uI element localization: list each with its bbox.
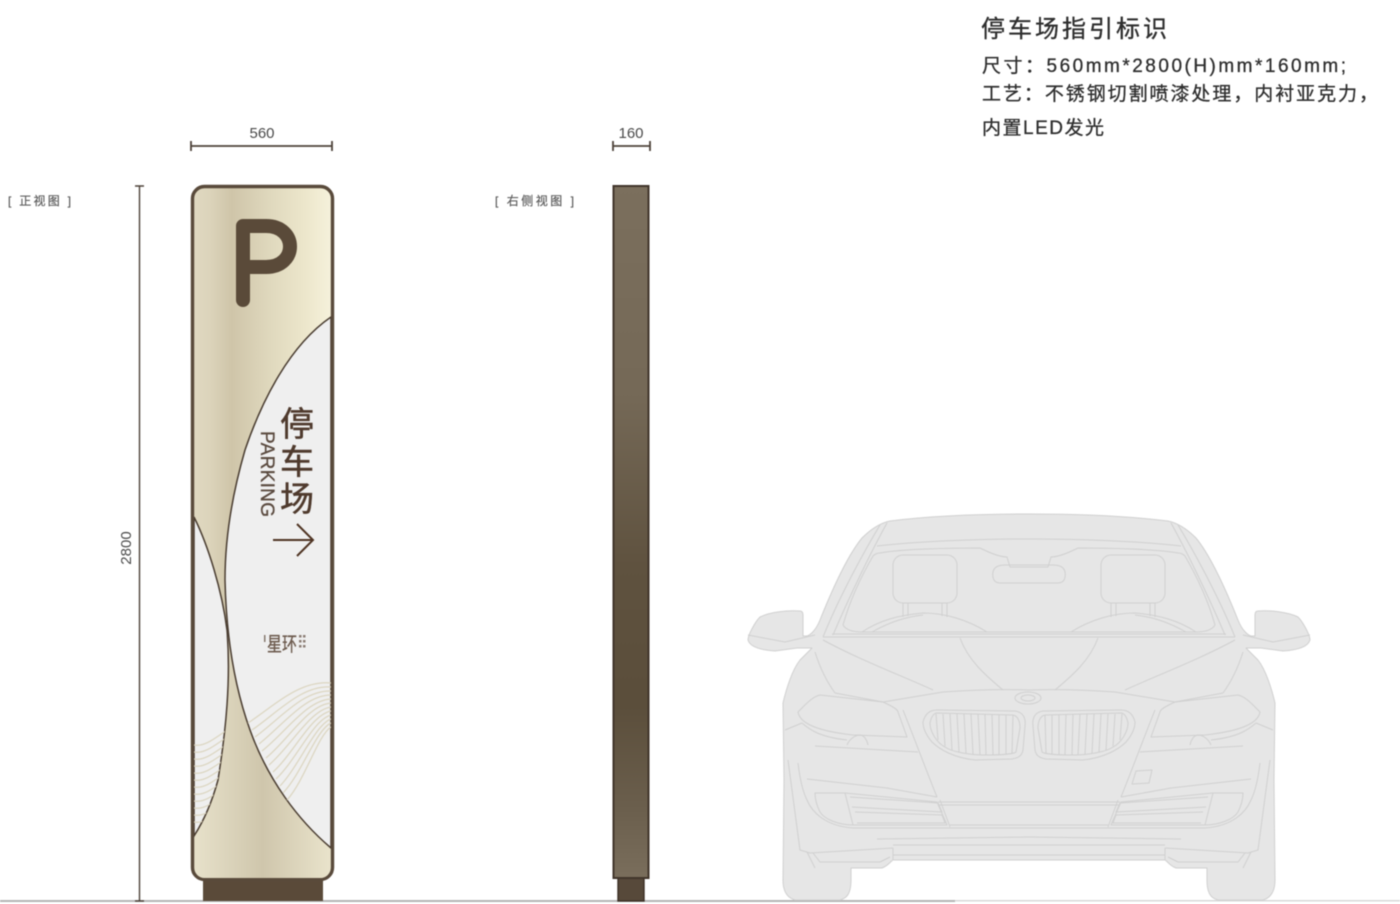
vertical Chinese sign text: 车 <box>280 444 314 482</box>
wave line pattern <box>194 683 331 822</box>
label: right side view: [ 右侧视图 ] <box>495 193 574 208</box>
dimension: width 560: 560 <box>249 125 275 142</box>
title: 停车场指引标识 <box>981 16 1167 43</box>
side view post <box>614 186 648 901</box>
car body fill <box>748 514 1310 900</box>
post base <box>618 878 644 901</box>
badge <box>1015 692 1041 704</box>
specification text: 内置LED发光 <box>982 117 1104 139</box>
icon: P <box>243 226 290 300</box>
specification text: 尺寸：560mm*2800(H)mm*160mm; <box>982 55 1346 77</box>
car half, right <box>1029 514 1310 900</box>
car front view <box>748 514 1310 900</box>
vertical Chinese sign text <box>280 406 314 519</box>
dimension: height 2800 <box>118 186 144 901</box>
vertical English text: PARKING <box>256 431 277 517</box>
car half, left <box>748 514 1029 900</box>
specification text: 工艺：不锈钢切割喷漆处理，内衬亚克力， <box>982 83 1378 105</box>
post body <box>614 186 648 878</box>
label: front view: [ 正视图 ] <box>8 193 71 208</box>
lower gold gradient <box>194 640 330 878</box>
sign body <box>192 186 332 880</box>
vertical Chinese sign text: 场 <box>280 481 314 519</box>
icon: direction arrow <box>273 524 313 556</box>
front view sign <box>192 186 332 901</box>
washer cover <box>1132 770 1152 784</box>
dimension: width 560 <box>191 125 332 151</box>
sign base <box>203 878 323 901</box>
white panels <box>194 317 331 848</box>
ground line <box>0 900 1400 902</box>
dimension: height 2800: 2800 <box>118 531 135 565</box>
logo: 星环 <box>267 633 297 656</box>
specification text <box>982 55 1378 139</box>
vertical Chinese sign text: 停 <box>280 406 314 444</box>
dimension: depth 160: 160 <box>618 125 644 142</box>
dimension: depth 160 <box>613 125 650 151</box>
